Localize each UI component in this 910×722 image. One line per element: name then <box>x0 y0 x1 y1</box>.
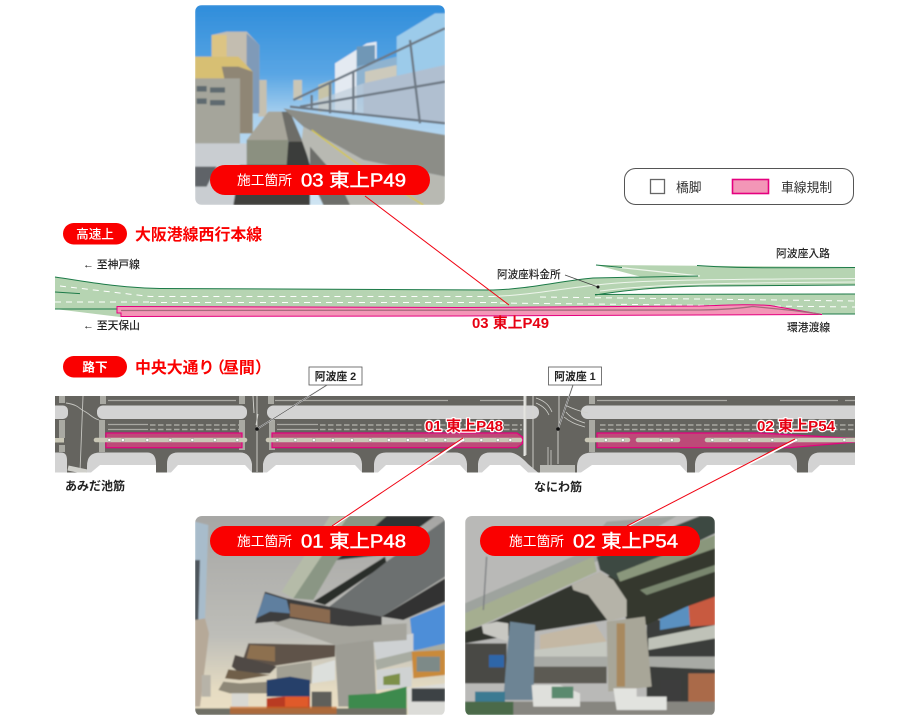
road: surface asphalt <box>55 396 855 472</box>
badge: site 03 <box>210 165 430 195</box>
callout: Awaza 1: 阿波座 1 <box>554 369 596 383</box>
section tag: surface road <box>63 356 127 378</box>
heading: Chuo-odori daytime: 中央大通り <box>135 359 214 377</box>
lane closure: surface pink zones <box>106 433 855 448</box>
section tag: expressway <box>63 223 127 244</box>
heading: Osaka Port line westbound: 大阪港線西行本線 <box>135 225 262 244</box>
label: 03 on map: 03 東上P49 <box>472 315 549 332</box>
label: Amida-ike-suji: あみだ池筋 <box>65 478 125 493</box>
road: surface map clipped <box>40 396 871 472</box>
heading: Chuo-odori daytime: （ <box>209 359 225 377</box>
callout: Awaza 2: 阿波座 2 <box>315 369 356 383</box>
road: lower sidewalk blocks <box>55 452 855 472</box>
lane closure: expressway pink band <box>117 305 822 316</box>
section: surface road plan <box>40 367 871 494</box>
legend label: pier: 橋脚 <box>676 180 702 195</box>
badge: site 01: 01 東上P48 <box>301 532 406 552</box>
legend label: lane closure: 車線規制 <box>781 180 832 195</box>
heading: Chuo-odori daytime: ） <box>255 359 271 377</box>
road: stub median <box>55 438 64 442</box>
section: expressway plan <box>55 246 855 334</box>
badge: site 02: 02 東上P54 <box>573 532 678 552</box>
heading: Chuo-odori daytime <box>135 359 271 377</box>
icon: pier square <box>650 180 664 194</box>
label: Awaza toll gate <box>497 268 600 288</box>
leader line: site 01 to map <box>332 438 464 526</box>
road: lane markings <box>108 400 855 430</box>
road: expressway green lanes <box>55 265 855 317</box>
label: Awaza toll gate: 阿波座料金所 <box>497 268 561 281</box>
road: crosswalk at Naniwa-suji <box>540 465 575 472</box>
photo: site 02 pier <box>465 515 715 715</box>
label: Awaza entrance: 阿波座入路 <box>776 246 830 260</box>
badge: site 02: 施工箇所 <box>509 533 564 549</box>
label: Kanko transfer line: 環港渡線 <box>787 320 830 334</box>
label: 01 on map: 01 東上P48 <box>425 418 503 435</box>
callout: Awaza 1 <box>548 367 602 431</box>
callout: Awaza 2 <box>255 367 362 431</box>
badge: site 01 <box>210 526 430 556</box>
road: upper medians <box>40 406 871 419</box>
label: to Tempozan: ← 至天保山 <box>83 318 140 332</box>
leader line: site 02 to map <box>627 439 796 526</box>
road: median with pier markers <box>96 439 857 441</box>
legend <box>624 168 854 204</box>
label: to Kobe line: ← 至神戸線 <box>83 257 140 271</box>
label: 02 on map: 02 東上P54 <box>757 418 835 435</box>
photo: site 01 pier <box>195 515 445 715</box>
heading: Chuo-odori daytime: 昼間 <box>223 359 255 377</box>
badge: site 02 <box>480 526 700 556</box>
badge: site 01: 施工箇所 <box>237 533 292 549</box>
badge: site 03: 03 東上P49 <box>301 170 406 190</box>
section tag: expressway: 高速上 <box>76 226 114 242</box>
icon: lane closure swatch <box>732 180 768 194</box>
section tag: surface road: 路下 <box>82 360 108 374</box>
photo: site 03 elevated view <box>195 5 445 205</box>
road: cross street detail <box>62 396 592 472</box>
road: white pavement cutouts <box>91 465 855 472</box>
leader line: site 03 to map <box>365 196 509 305</box>
badge: site 03: 施工箇所 <box>237 172 292 188</box>
label: Naniwa-suji: なにわ筋 <box>534 479 582 494</box>
